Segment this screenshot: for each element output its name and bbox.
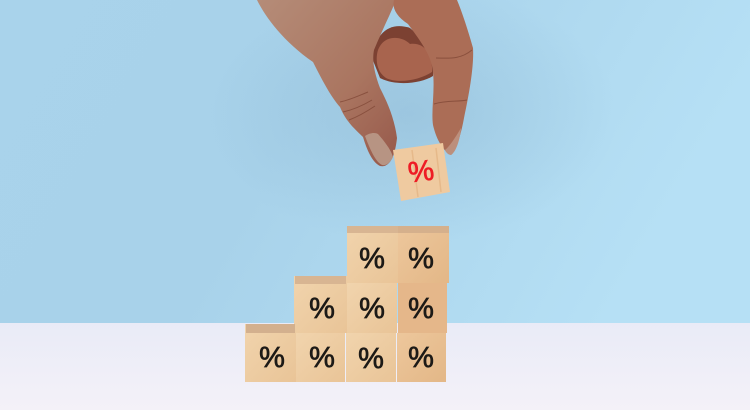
hand back and thumb bbox=[257, 0, 397, 166]
block: bottom row first: % bbox=[259, 342, 285, 374]
block: top row left bbox=[347, 226, 398, 283]
wooden block with red percent bbox=[393, 143, 450, 201]
block: bottom row first bbox=[245, 324, 296, 382]
block: top row left: % bbox=[359, 243, 385, 275]
block: bottom row fourth: % bbox=[408, 342, 434, 374]
block: bottom row third bbox=[346, 333, 396, 382]
block: bottom row fourth bbox=[397, 333, 446, 382]
red percent sign: % bbox=[406, 155, 436, 189]
block: middle row right bbox=[398, 283, 447, 333]
block: middle row left bbox=[294, 276, 347, 333]
hand bbox=[257, 0, 473, 166]
index finger bbox=[394, 0, 473, 155]
index fingernail bbox=[445, 128, 461, 155]
background wall bbox=[0, 0, 750, 324]
block: bottom row second bbox=[296, 333, 345, 382]
block: middle row centre: % bbox=[359, 293, 385, 325]
block: middle row right: % bbox=[408, 293, 434, 325]
block: middle row centre bbox=[347, 283, 397, 333]
block: top row right bbox=[398, 226, 449, 283]
block stack bbox=[245, 226, 449, 382]
table surface bbox=[0, 323, 750, 410]
knuckle creases bbox=[340, 50, 472, 120]
thumb nail bbox=[365, 133, 393, 165]
block: middle row left: % bbox=[309, 293, 335, 325]
block: top row right: % bbox=[408, 243, 434, 275]
curled fingers bbox=[372, 26, 435, 83]
block: bottom row third: % bbox=[358, 343, 384, 375]
block: bottom row second: % bbox=[309, 342, 335, 374]
